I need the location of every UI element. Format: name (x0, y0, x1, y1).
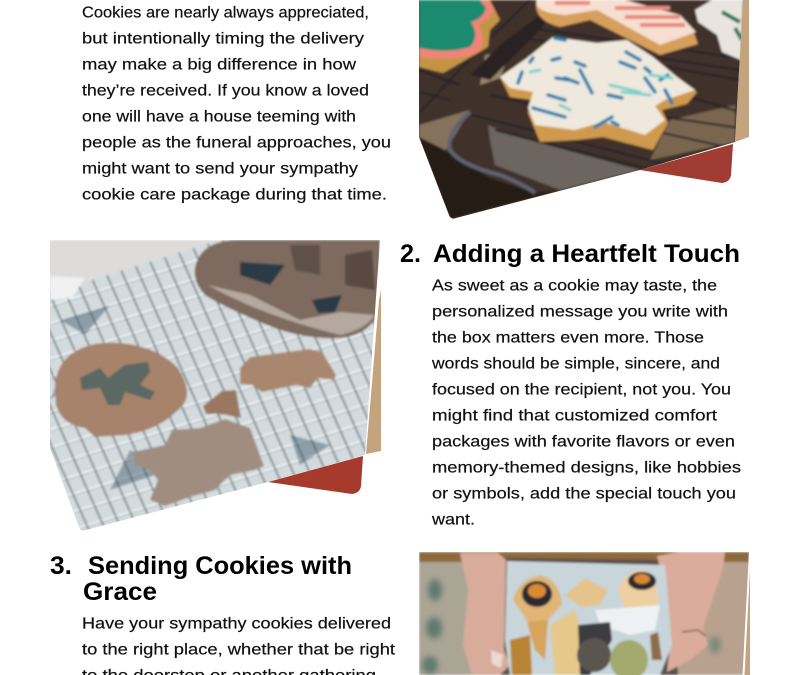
text block: timing the delivery: might want to send your sympathy (82, 160, 358, 178)
text block: heartfelt touch: personalized message you write with (432, 304, 728, 320)
text block: heartfelt touch: focused on the recipient, not you. You (432, 382, 731, 398)
photo 2 accent: tan strip (366, 290, 381, 454)
text block: timing the delivery: Cookies are nearly always appreciated, (82, 4, 369, 22)
text block: heartfelt touch: want. (431, 512, 475, 528)
heading: section 3 (50, 552, 352, 606)
photo 3: left hand (460, 553, 510, 675)
photo 1: striped heart cookie (536, 0, 698, 55)
text block: heartfelt touch: might find that customized comfort (432, 408, 718, 424)
text block: sending with grace: to the right place, whether that be right (82, 642, 396, 658)
text block: heartfelt touch: words should be simple, sincere, and (431, 356, 720, 372)
heading: section 3: 3. (50, 552, 72, 580)
text block: timing the delivery: people as the funeral approaches, you (82, 134, 391, 152)
text block: timing the delivery: they’re received. If you know a loved (82, 82, 369, 100)
text block: heartfelt touch (431, 278, 741, 528)
photo 1 accent: tan strip (735, 0, 749, 142)
text block: heartfelt touch: the box matters even more. Those (432, 330, 704, 346)
photo 3: right hand (657, 552, 725, 672)
text block: heartfelt touch: or symbols, add the special touch you (432, 486, 736, 502)
photo 1 accent: red corner (640, 144, 733, 183)
text block: timing the delivery (82, 4, 391, 204)
photo 1: centre cookie (500, 77, 698, 152)
text block: heartfelt touch: memory-themed designs, like hobbies (432, 460, 741, 476)
photo 3 accent: tan strip (744, 570, 750, 675)
heading: section 2: Adding a Heartfelt Touch (433, 240, 740, 268)
text block: heartfelt touch: As sweet as a cookie may taste, the (432, 278, 717, 294)
text block: timing the delivery: may make a big difference in how (82, 56, 357, 74)
heading: section 3: Grace (83, 578, 157, 606)
heading: section 2: 2. (400, 240, 421, 268)
text block: sending with grace: Have your sympathy cookies delivered (82, 616, 391, 632)
text block: timing the delivery: one will have a house teeming with (82, 108, 356, 126)
text block: sending with grace (82, 616, 396, 675)
text block: timing the delivery: but intentionally timing the delivery (82, 30, 364, 48)
text block: timing the delivery: cookie care package during that time. (82, 186, 387, 204)
photo 1: right cookie (695, 0, 743, 60)
photo 2: bus cookie (240, 349, 336, 392)
photo 2: cookie dough on a cooling rack (45, 240, 385, 535)
photo 3: cookies in box (513, 575, 562, 622)
photo 2 accent: red corner (268, 456, 363, 494)
photo 2: bear cookie (133, 419, 264, 506)
photo 3: box (505, 561, 672, 675)
photo 2: large cut dough (195, 240, 380, 338)
text block: heartfelt touch: packages with favorite flavors or even (432, 434, 735, 450)
photo 3: box shadow (500, 558, 678, 675)
photo 1: rack wires (419, 0, 740, 182)
heading: section 3: Sending Cookies with (88, 552, 352, 580)
photo 1: iced cookies on a cooling rack (415, 0, 750, 225)
photo 1: green cookie (419, 0, 500, 73)
photo 2: small heart cookie (203, 390, 241, 418)
photo 3: hands holding a box of cookies (419, 552, 750, 675)
photo 2: round cookie with cut-out (55, 343, 187, 437)
